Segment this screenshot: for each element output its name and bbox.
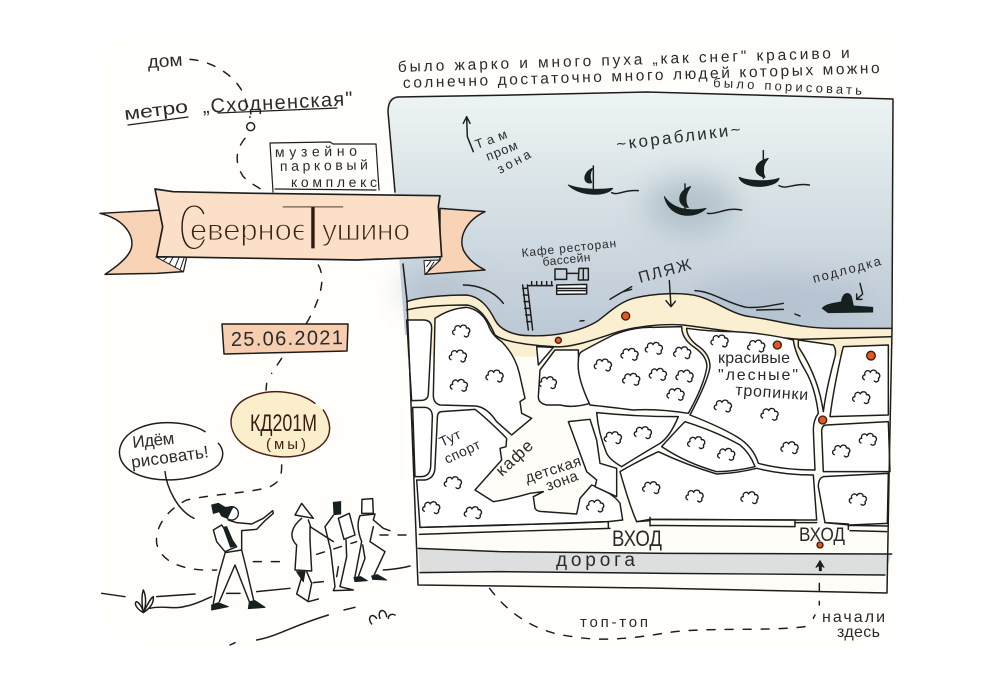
callout: museum park complex: комплекс [291, 174, 377, 190]
land area [407, 357, 892, 593]
label: industrial zone [473, 126, 534, 177]
label: top-top: топ-топ [580, 614, 648, 631]
route: from start to the walking group [488, 583, 819, 639]
figure: person in box hat [354, 499, 390, 582]
metro station circle [247, 123, 255, 131]
label: sport here: спорт [442, 436, 483, 467]
coastline [407, 294, 892, 336]
arrow: beach [666, 281, 675, 307]
text: metro: метро [123, 96, 189, 124]
icon: sprout [370, 610, 395, 624]
label: industrial zone: зона [494, 146, 534, 177]
label: entrance 2: ВХОД [799, 525, 845, 546]
road and fence lines [418, 517, 892, 575]
sea details [463, 117, 873, 330]
children's zone outline [568, 419, 617, 497]
map ground and paths [407, 294, 892, 593]
label: beautiful forest trails: красивые [718, 350, 790, 367]
figure: woman in dress [292, 503, 333, 602]
label: beautiful forest trails [718, 350, 809, 404]
ship 1 [568, 166, 638, 194]
note: weather and people: было жарко и много пуха „как снег" красиво и [398, 45, 850, 76]
label: submarine: подлодка [811, 253, 883, 286]
bubble: group name КД201М: (мы) [266, 436, 306, 453]
label: cafe restaurant pool: Кафе ресторан [521, 236, 617, 260]
ground lines [102, 566, 410, 645]
sky and water wash [388, 92, 893, 335]
callout: museum park complex: музейно [275, 143, 357, 160]
orange location dots [555, 312, 875, 548]
label: children's zone: детская [523, 453, 583, 487]
bubble: group name КД201М: КД201М [250, 410, 317, 437]
panel: park map [388, 92, 893, 593]
label: cafe: кафе [492, 436, 537, 480]
label: industrial zone: Там [473, 126, 509, 152]
date box: 25.06.2021 [231, 327, 343, 351]
speech bubble: go draw [119, 423, 223, 518]
label: started here: здесь [837, 624, 880, 641]
arrow: industrial zone [463, 117, 473, 152]
speech bubble: go draw: Идём [131, 429, 175, 452]
sketch route: home to metro to banner [190, 59, 322, 373]
label: children's zone: зона [544, 467, 581, 495]
label: industrial zone: пром [484, 137, 520, 164]
banner title: ушино [322, 214, 410, 247]
outer frame line [388, 92, 893, 593]
figure: person with backpack [325, 502, 355, 591]
note: weather and people [398, 45, 880, 98]
banner title: С [178, 191, 208, 265]
icon: submarine [822, 283, 873, 313]
label: beautiful forest trails: "лесные" [718, 367, 798, 384]
ship 2 [664, 184, 742, 215]
label: sport here [437, 426, 483, 467]
route dashes [157, 383, 410, 570]
map labels [437, 120, 883, 571]
label: beach: ПЛЯЖ [637, 256, 693, 287]
speech bubble: go draw: рисовать! [130, 442, 210, 472]
figure: woman pointing [212, 503, 273, 610]
paper background [105, 35, 900, 645]
label: entrance 1: ВХОД [612, 526, 662, 551]
note: weather and people: солнечно достаточно много людей которых можно [403, 60, 880, 92]
label: road: дорога [556, 550, 635, 571]
scene: people walking [102, 383, 410, 645]
label: sport here: Тут [437, 426, 464, 450]
water ripples [463, 285, 800, 321]
label: started here: начали [822, 609, 885, 626]
beach band [407, 294, 892, 357]
icon: plant [135, 590, 153, 613]
arrow: start point [816, 561, 824, 571]
text: home: дом [147, 50, 183, 72]
callout: museum park complex [270, 142, 379, 192]
label: started here [822, 609, 885, 641]
banner: Северное Тушино [100, 189, 485, 274]
text: metro station name: „Сходненская" [202, 88, 353, 118]
label: little boats: ~кораблики~ [615, 120, 742, 154]
bubble: group name КД201М [231, 392, 330, 457]
ship 3 [739, 151, 809, 187]
label: beautiful forest trails: тропинки [735, 382, 809, 404]
bushes [423, 325, 880, 518]
icon: pier ladder [523, 282, 553, 330]
icon: cafe, restaurant and pool [555, 268, 588, 294]
ribbon shapes [100, 189, 485, 274]
label: cafe restaurant pool: бассейн [542, 250, 591, 269]
banner title: еверное [190, 214, 309, 247]
road surface [418, 548, 892, 575]
callout: museum park complex: парковый [280, 156, 368, 174]
park blocks [407, 307, 890, 527]
banner title [178, 190, 410, 265]
banner title: Т [276, 190, 350, 265]
note: weather and people: было порисовать [713, 75, 863, 98]
